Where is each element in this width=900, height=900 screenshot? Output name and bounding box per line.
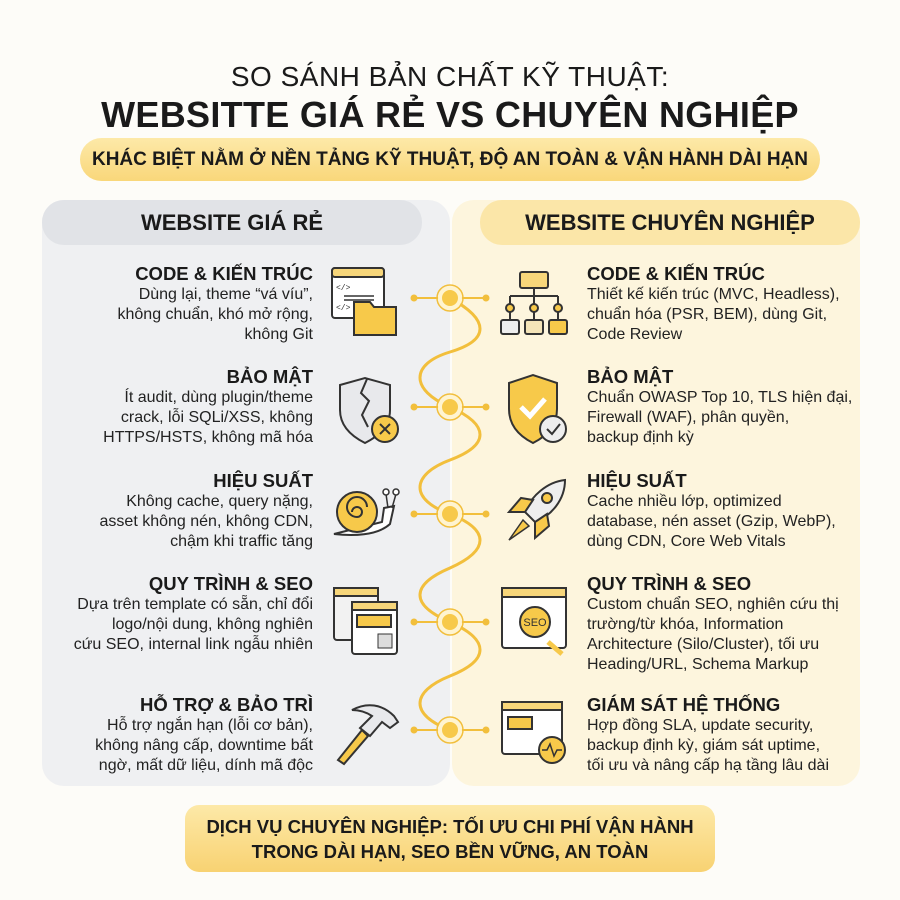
left item: code & kiến trúc: không chuẩn, khó mở rộng, xyxy=(118,306,313,323)
icon: code window with folder: </> xyxy=(336,284,351,293)
right item: bảo mật: BẢO MẬT xyxy=(587,366,673,387)
left item: hỗ trợ & bảo trì: ngờ, mất dữ liệu, dính mã độc xyxy=(99,757,313,774)
left item: hiệu suất: Không cache, query nặng, xyxy=(126,493,313,510)
left item: bảo mật xyxy=(103,366,314,446)
left item: quy trình & seo: logo/nội dung, không nghiên xyxy=(112,616,313,633)
panel: website chuyên nghiệp xyxy=(452,200,860,786)
left item: hiệu suất: chậm khi traffic tăng xyxy=(170,533,313,550)
right item: bảo mật: Chuẩn OWASP Top 10, TLS hiện đại, xyxy=(587,389,852,406)
icon: seo window: SEO xyxy=(523,617,547,629)
right item: quy trình & seo xyxy=(587,573,839,673)
icon: broken shield xyxy=(339,377,399,444)
left item: hiệu suất: HIỆU SUẤT xyxy=(213,470,313,491)
icon: monitoring window xyxy=(501,701,566,764)
right item: bảo mật: Firewall (WAF), phân quyền, xyxy=(587,409,789,426)
right item: hiệu suất xyxy=(587,470,836,550)
left item: code & kiến trúc: Dùng lại, theme “vá víu”, xyxy=(139,286,313,303)
title: WEBSITTE GIÁ RẺ VS CHUYÊN NGHIỆP xyxy=(101,94,799,135)
right item: giám sát hệ thống: GIÁM SÁT HỆ THỐNG xyxy=(587,694,780,715)
left item: hỗ trợ & bảo trì: Hỗ trợ ngắn hạn (lỗi cơ bản), xyxy=(107,717,313,734)
icon: rocket xyxy=(506,478,566,541)
right item: hiệu suất: dùng CDN, Core Web Vitals xyxy=(587,533,786,550)
right item: code & kiến trúc: Thiết kế kiến trúc (MVC, Headless), xyxy=(587,286,840,303)
left item: hỗ trợ & bảo trì xyxy=(95,694,313,774)
left item: code & kiến trúc: CODE & KIẾN TRÚC xyxy=(135,263,313,284)
right item: hiệu suất: Cache nhiều lớp, optimized xyxy=(587,493,782,510)
bottom conclusion pill xyxy=(185,805,715,872)
left item: bảo mật: Ít audit, dùng plugin/theme xyxy=(124,389,313,406)
right item: giám sát hệ thống: tối ưu và nâng cấp hạ tầng lâu dài xyxy=(587,757,829,774)
right item: quy trình & seo: trường/từ khóa, Information xyxy=(587,616,783,633)
icon: hammer xyxy=(336,704,400,766)
right item: quy trình & seo: Custom chuẩn SEO, nghiên cứu thị xyxy=(587,596,839,613)
right item: giám sát hệ thống: backup định kỳ, giám sát uptime, xyxy=(587,737,820,754)
left item: quy trình & seo: cứu SEO, internal link ngẫu nhiên xyxy=(74,636,313,653)
heading: website giá rẻ: WEBSITE GIÁ RẺ xyxy=(141,210,323,235)
panel: website giá rẻ xyxy=(42,200,450,786)
right item: quy trình & seo: QUY TRÌNH & SEO xyxy=(587,573,751,594)
heading: website chuyên nghiệp xyxy=(480,200,860,245)
left item: hỗ trợ & bảo trì: HỖ TRỢ & BẢO TRÌ xyxy=(140,694,313,715)
icon: code window with folder: </> xyxy=(336,304,351,313)
icon: code window with folder xyxy=(331,267,397,336)
left item: bảo mật: HTTPS/HSTS, không mã hóa xyxy=(103,429,313,446)
left item: code & kiến trúc: không Git xyxy=(245,326,313,343)
left item: quy trình & seo xyxy=(74,573,313,653)
right item: giám sát hệ thống: Hợp đồng SLA, update security, xyxy=(587,717,813,734)
left item: code & kiến trúc xyxy=(118,263,313,343)
icon: template windows xyxy=(333,587,398,655)
icon: architecture tree xyxy=(500,271,568,335)
center wavy path xyxy=(410,284,490,744)
right item: hiệu suất: database, nén asset (Gzip, WebP), xyxy=(587,513,836,530)
right item: bảo mật xyxy=(587,366,852,446)
right item: hiệu suất: HIỆU SUẤT xyxy=(587,470,687,491)
right item: code & kiến trúc xyxy=(587,263,840,343)
left item: quy trình & seo: Dựa trên template có sẵn, chỉ đổi xyxy=(77,596,313,613)
left item: quy trình & seo: QUY TRÌNH & SEO xyxy=(149,573,313,594)
left item: bảo mật: crack, lỗi SQLi/XSS, không xyxy=(121,409,313,426)
icon: shield check xyxy=(508,374,567,444)
left item: hỗ trợ & bảo trì: không nâng cấp, downtime bất xyxy=(95,737,313,754)
bottom conclusion pill: DỊCH VỤ CHUYÊN NGHIỆP: TỐI ƯU CHI PHÍ VẬN HÀNH xyxy=(206,816,694,837)
subtitle pill xyxy=(80,138,820,181)
left item: hiệu suất xyxy=(100,470,313,550)
left item: hiệu suất: asset không nén, không CDN, xyxy=(100,513,313,530)
left item: bảo mật: BẢO MẬT xyxy=(227,366,313,387)
subtitle pill: KHÁC BIỆT NẰM Ở NỀN TẢNG KỸ THUẬT, ĐỘ AN TOÀN & VẬN HÀNH DÀI HẠN xyxy=(92,149,808,170)
right item: code & kiến trúc: chuẩn hóa (PSR, BEM), dùng Git, xyxy=(587,306,827,323)
right item: code & kiến trúc: CODE & KIẾN TRÚC xyxy=(587,263,765,284)
right item: giám sát hệ thống xyxy=(587,694,829,774)
icon: seo window xyxy=(501,587,567,656)
right item: quy trình & seo: Architecture (Silo/Cluster), tối ưu xyxy=(587,636,819,653)
icon: snail xyxy=(334,488,400,536)
title xyxy=(101,61,799,135)
right item: quy trình & seo: Heading/URL, Schema Markup xyxy=(587,656,808,673)
heading: website giá rẻ xyxy=(42,200,422,245)
right item: bảo mật: backup định kỳ xyxy=(587,429,694,446)
heading: website chuyên nghiệp: WEBSITE CHUYÊN NGHIỆP xyxy=(525,210,815,235)
bottom conclusion pill: TRONG DÀI HẠN, SEO BỀN VỮNG, AN TOÀN xyxy=(252,841,648,862)
right item: code & kiến trúc: Code Review xyxy=(587,326,682,343)
title: SO SÁNH BẢN CHẤT KỸ THUẬT: xyxy=(231,61,669,92)
